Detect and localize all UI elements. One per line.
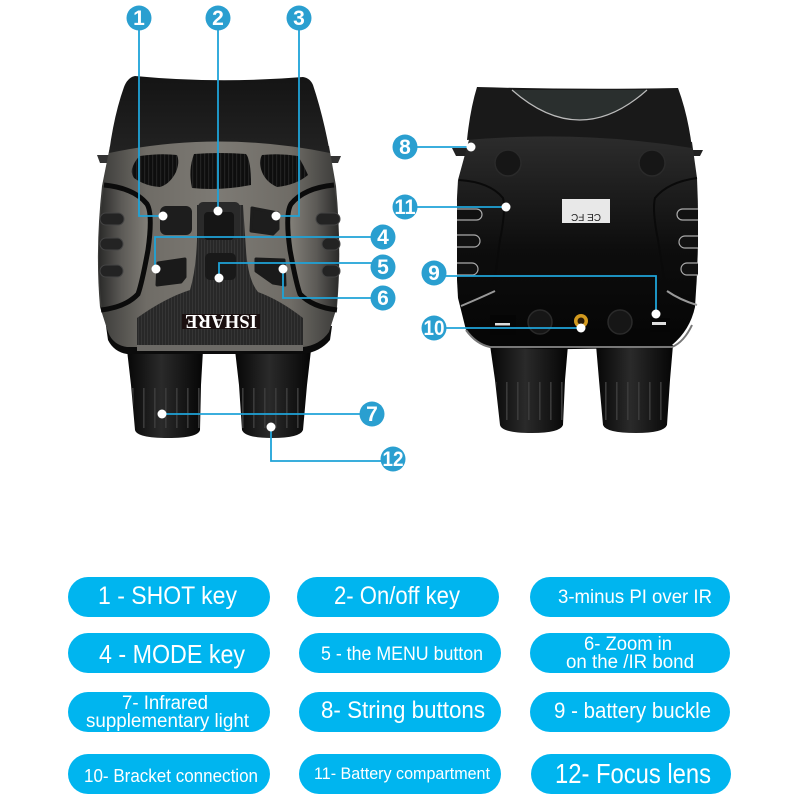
plus button [251, 208, 278, 234]
pill 10 [68, 754, 270, 794]
battery latch right [650, 318, 670, 332]
back body [456, 129, 698, 349]
body seams [459, 180, 504, 285]
tripod socket [574, 314, 588, 328]
pill 8 [299, 692, 501, 732]
badge 10: 10 [424, 317, 444, 340]
badge 8: 8 [399, 136, 411, 159]
rubber feet [495, 150, 665, 334]
center dark panel [137, 205, 303, 345]
pill 1 [68, 577, 270, 617]
pill 7 [68, 692, 270, 732]
black underside rim [106, 326, 332, 354]
badge 4: 4 [377, 226, 389, 249]
badge 7 [360, 402, 384, 426]
pill 5 [299, 633, 501, 673]
left objective lens [127, 350, 203, 438]
legend pills [68, 577, 731, 794]
number badges [126, 6, 446, 472]
gray body [98, 133, 339, 347]
back eyecup [467, 87, 692, 148]
pill 5: 5 - the MENU button [321, 644, 483, 665]
mode button [157, 259, 185, 285]
badge 11: 11 [394, 196, 416, 219]
badge 2 [206, 6, 230, 30]
pill 6: on the /IR bond [566, 652, 694, 673]
grip highlights [461, 291, 697, 306]
badge 5: 5 [377, 256, 389, 279]
power button [198, 202, 240, 240]
pill 7: supplementary light [86, 711, 250, 732]
pill 9 [530, 692, 730, 732]
badge 12: 12 [382, 448, 404, 471]
pill 4: 4 - MODE key [99, 639, 245, 669]
pill 11 [299, 754, 501, 794]
front view binoculars [97, 76, 341, 438]
pill 12 [531, 754, 731, 794]
white cover over rib ends [440, 200, 715, 290]
badge 3: 3 [293, 7, 305, 30]
menu button [205, 253, 236, 280]
callout dots [152, 142, 660, 432]
pill 7: 7- Infrared [122, 693, 208, 714]
shot button [160, 206, 192, 235]
back right lens [596, 345, 673, 433]
badge 2: 2 [212, 7, 224, 30]
pill 11: 11- Battery compartment [314, 764, 490, 783]
badge 1: 1 [133, 7, 145, 30]
pill 3: 3-minus PI over IR [558, 587, 712, 608]
back left lens [490, 345, 568, 433]
badge 9 [422, 260, 446, 286]
callout lines [139, 18, 656, 461]
battery latch left [490, 315, 516, 335]
pill 4 [68, 633, 270, 673]
pill 3 [530, 577, 730, 617]
badge 3 [286, 6, 312, 30]
badge 4 [370, 224, 396, 250]
badge 7: 7 [366, 403, 378, 426]
badge 6 [370, 286, 396, 310]
pill 12: 12- Focus lens [555, 758, 711, 789]
badge 9: 9 [428, 262, 440, 285]
right side ribs [677, 209, 709, 275]
pill 2 [297, 577, 499, 617]
badge 8 [392, 134, 418, 160]
pill 1: 1 - SHOT key [98, 582, 237, 610]
back view binoculars [440, 87, 715, 433]
badge 5 [370, 254, 396, 280]
side strap lugs [97, 155, 341, 163]
eyecup [109, 76, 330, 153]
pill 8: 8- String buttons [321, 697, 485, 724]
bottom rim [466, 325, 692, 347]
left side ribs [450, 209, 482, 275]
strap lugs [452, 148, 703, 156]
pill 2: 2- On/off key [334, 582, 460, 610]
vents [132, 153, 308, 189]
pill 9: 9 - battery buckle [554, 698, 711, 723]
left grip [99, 185, 150, 310]
right grip [288, 185, 340, 310]
zoom button [256, 259, 285, 285]
product label: CE FC [571, 211, 601, 222]
badge 1 [126, 6, 152, 30]
product label [562, 199, 610, 223]
pill 6: 6- Zoom in [584, 634, 672, 655]
pill 6 [530, 633, 730, 673]
badge 6: 6 [377, 287, 389, 310]
pill 10: 10- Bracket connection [84, 766, 258, 786]
ISHARE logo: ISHARE [185, 310, 257, 332]
right objective lens [235, 350, 311, 438]
